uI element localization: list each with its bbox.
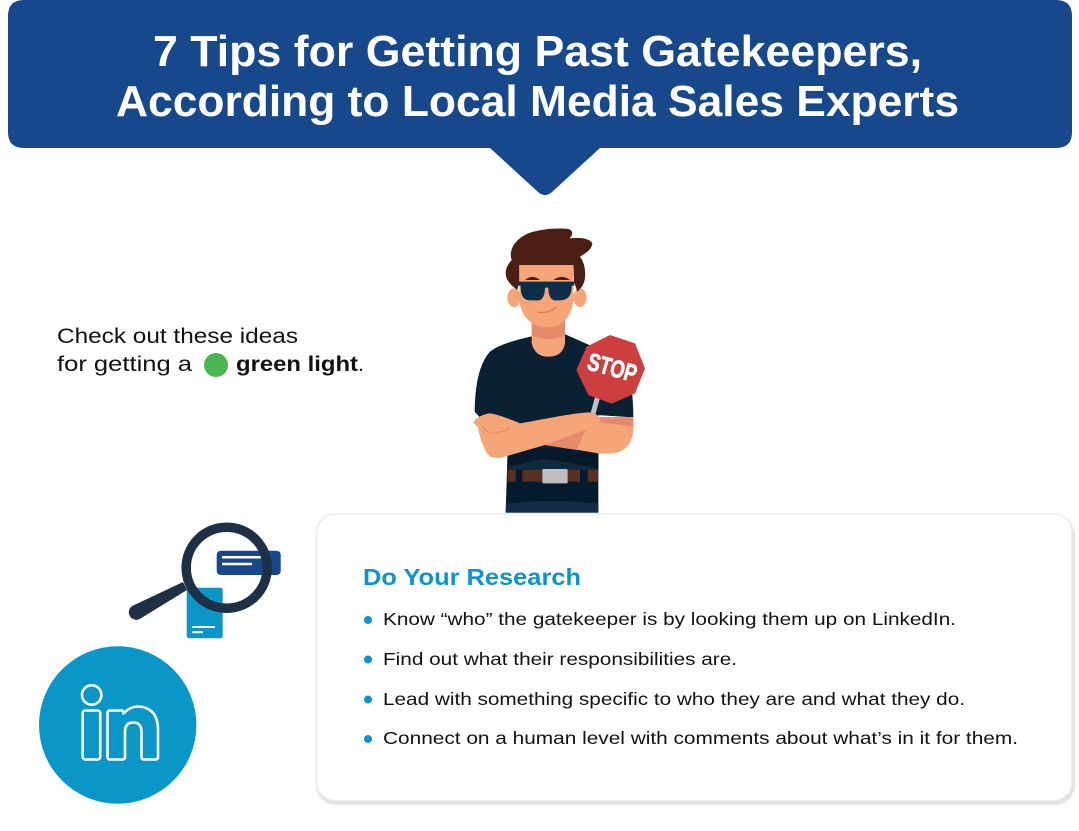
title: According to Local Media Sales Experts <box>116 77 959 126</box>
intro text: green light <box>236 353 358 376</box>
panel heading: Do Your Research <box>363 564 581 590</box>
bullet list: Find out what their responsibilities are. <box>383 649 737 669</box>
illustration: gatekeeper with stop sign <box>473 229 645 513</box>
panel: do your research <box>316 514 1075 805</box>
face <box>519 265 573 327</box>
title banner <box>8 0 1072 195</box>
intro text: for getting a <box>57 353 192 376</box>
bullet list: Lead with something specific to who they are and what they do. <box>383 689 965 709</box>
eyebrows <box>525 277 540 280</box>
bullet list <box>364 609 1018 748</box>
stop sign <box>576 335 645 404</box>
ears <box>507 288 521 307</box>
belt <box>508 469 598 483</box>
crossed arms <box>545 417 633 453</box>
title: 7 Tips for Getting Past Gatekeepers, <box>153 27 922 76</box>
stop label: STOP <box>584 349 640 388</box>
intro text: Check out these ideas <box>57 325 298 348</box>
bullet list: Connect on a human level with comments about what’s in it for them. <box>383 728 1018 748</box>
trousers <box>506 448 598 513</box>
pole <box>593 397 598 415</box>
smile <box>538 308 556 313</box>
hair back <box>506 257 585 292</box>
light-blue document <box>187 588 223 638</box>
neck <box>532 315 565 357</box>
icon: magnifying glass over documents <box>129 527 281 638</box>
icon: LinkedIn <box>39 646 196 804</box>
intro text: . <box>358 353 364 376</box>
magnifier <box>186 527 267 608</box>
title <box>116 27 959 126</box>
intro text <box>57 325 364 377</box>
icon: green light <box>204 353 228 377</box>
sunglasses <box>518 282 574 300</box>
t-shirt <box>475 334 633 423</box>
hair top <box>511 229 592 265</box>
dark-blue document <box>217 551 281 575</box>
bullet list: Know “who” the gatekeeper is by looking them up on LinkedIn. <box>383 609 956 629</box>
